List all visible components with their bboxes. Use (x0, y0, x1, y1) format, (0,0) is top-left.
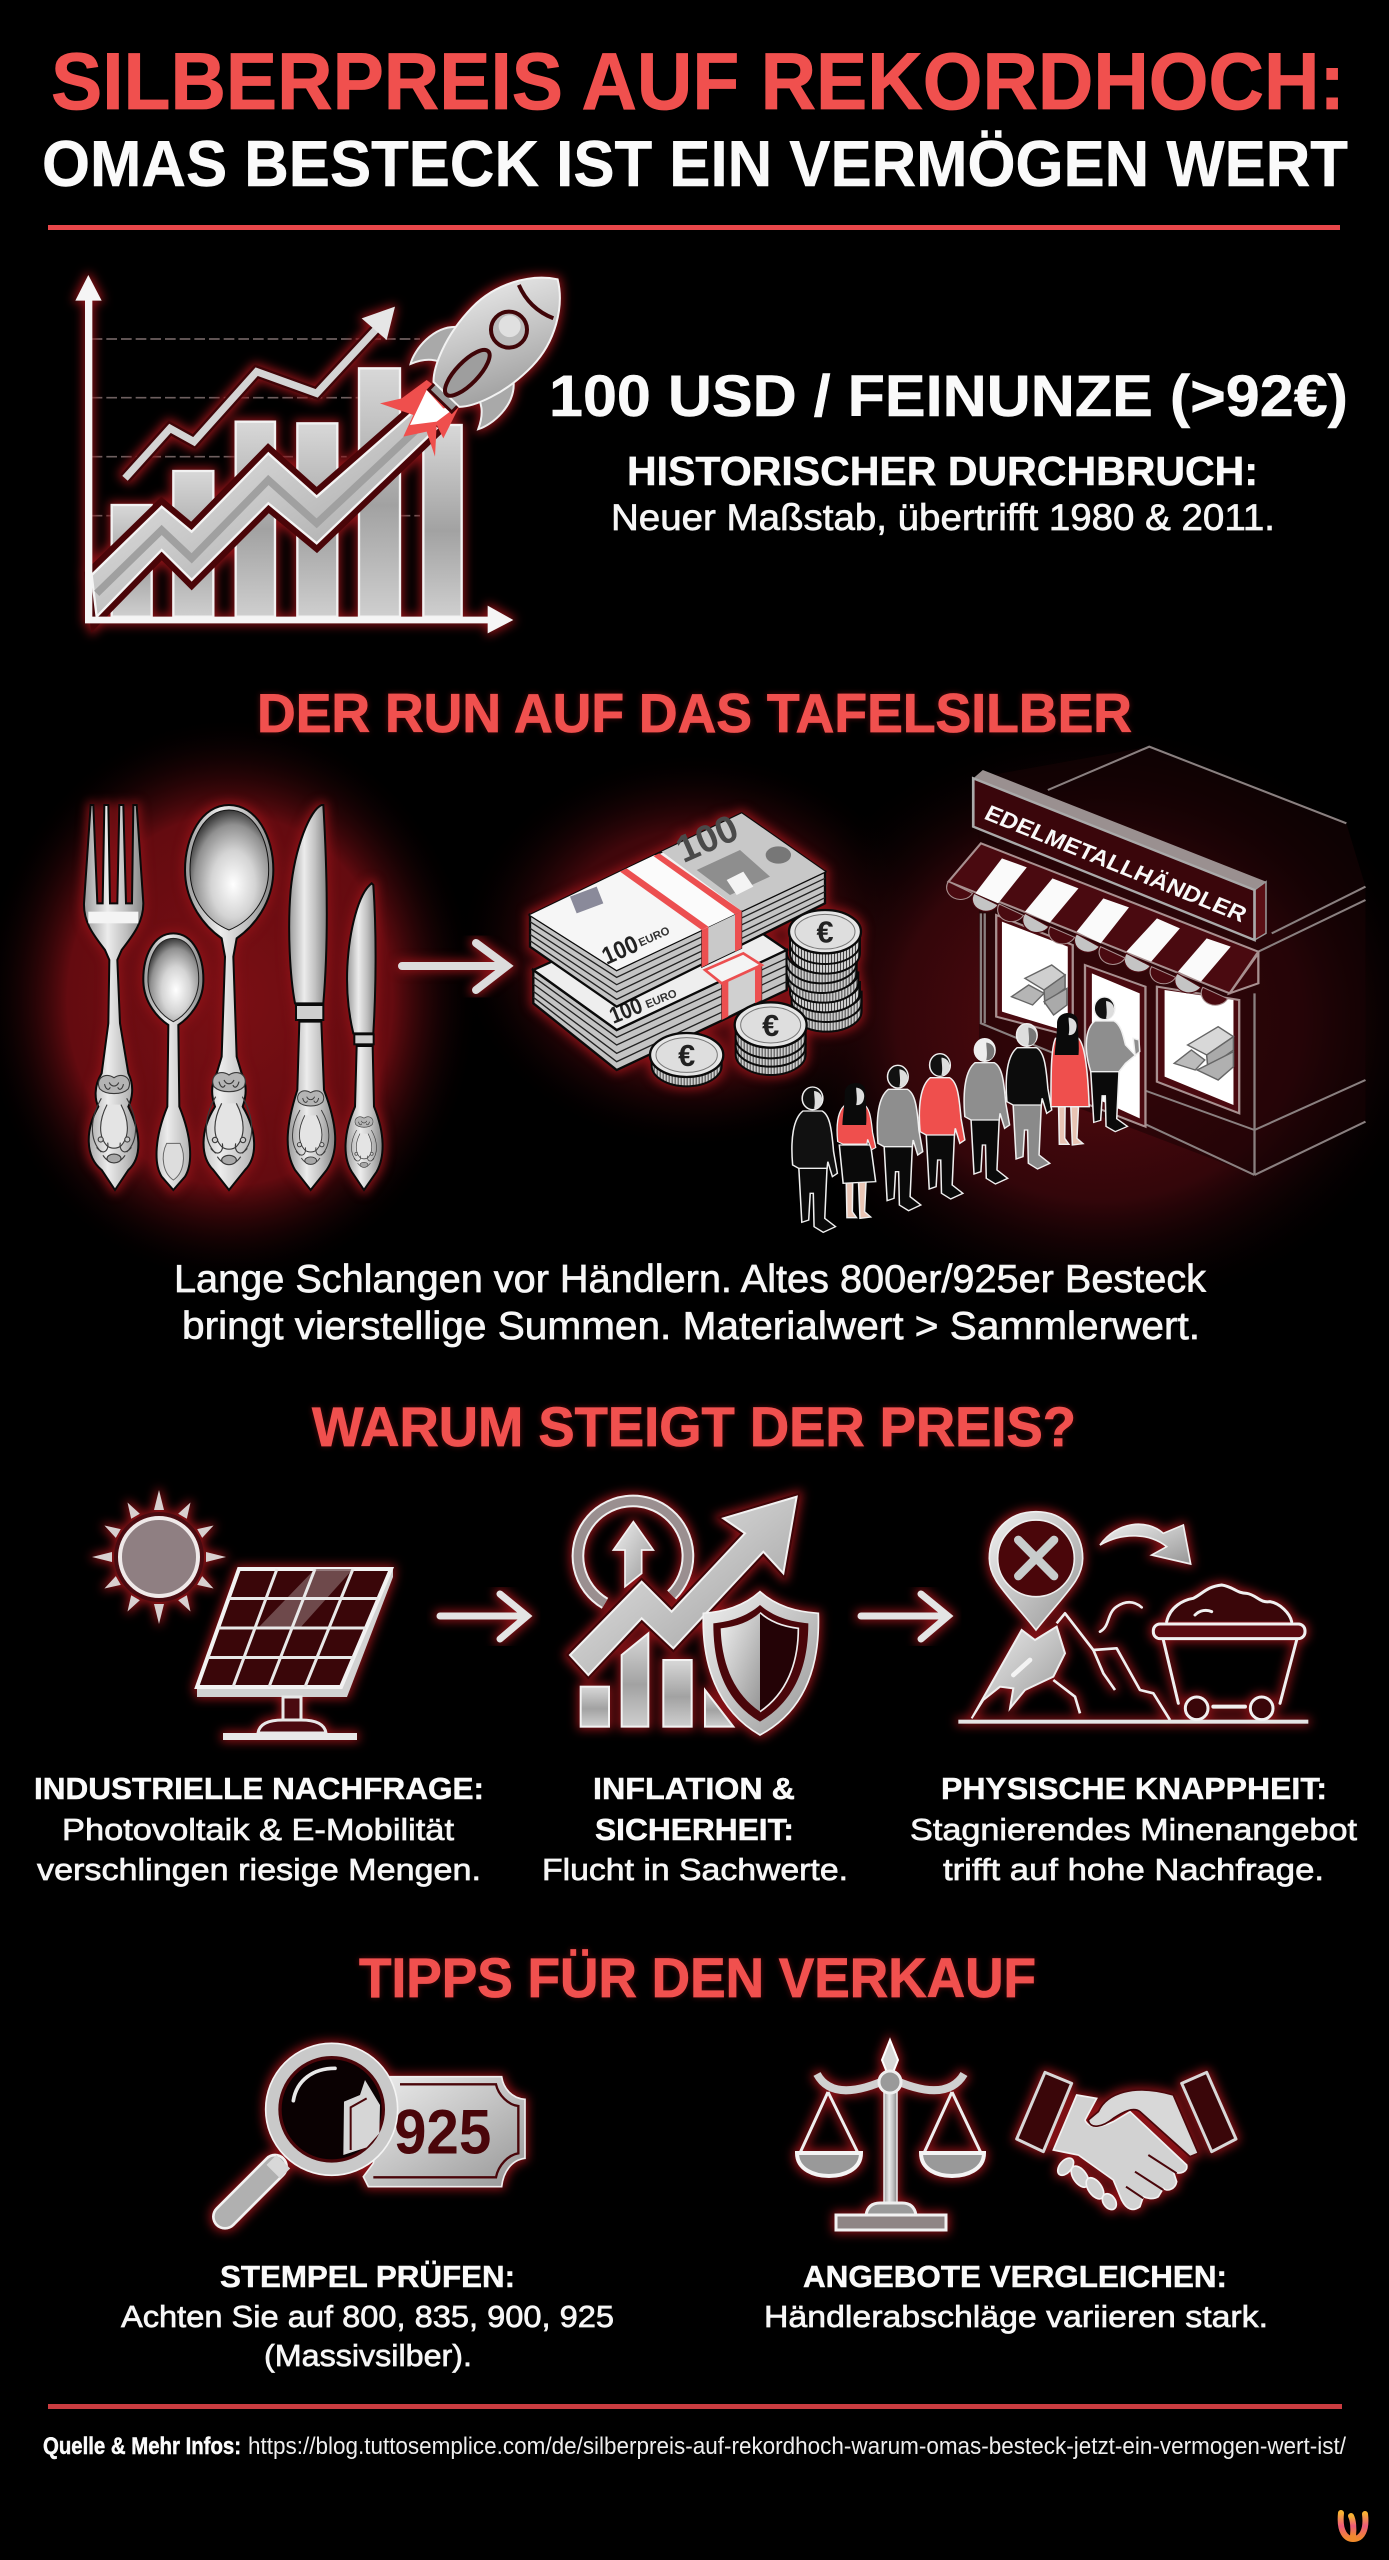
column: scarcity (910, 1771, 1357, 1887)
curved arrow (1100, 1524, 1191, 1564)
source line: https://blog.tuttosemplice.com/de/silberpreis-auf-rekordhoch-warum-omas-besteck-jetzt-ein-vermogen-wert-ist/ (248, 2433, 1346, 2460)
column: industrial demand: Photovoltaik & E-Mobilität (62, 1812, 454, 1847)
person 2 (837, 1083, 876, 1218)
column: inflation (542, 1771, 848, 1887)
tip: compare text: ANGEBOTE VERGLEICHEN: (803, 2259, 1227, 2294)
icon: scarcity mine and cart (958, 1512, 1308, 1724)
tip: hallmark text: STEMPEL PRÜFEN: (220, 2259, 515, 2294)
shop building (947, 747, 1365, 1175)
money and coins illustration (530, 807, 862, 1086)
tip: compare text: Händlerabschläge variieren stark. (764, 2299, 1268, 2334)
tip: hallmark text (121, 2259, 614, 2373)
lower banknote stack (533, 893, 787, 1070)
lower banknote stack: EURO (644, 988, 679, 1011)
icon: sun and solar panel (92, 1490, 393, 1740)
price: 100 USD / FEINUNZE (>92€) (549, 364, 1348, 429)
silver bars in window right (1174, 1027, 1233, 1080)
title line 1: SILBERPREIS AUF REKORDHOCH: (51, 37, 1345, 127)
shield (703, 1592, 818, 1735)
person 5 (964, 1039, 1010, 1184)
column: industrial demand (34, 1771, 484, 1887)
awning (947, 843, 1258, 1005)
person 7 (1051, 1013, 1089, 1145)
rising arrow (570, 1497, 797, 1675)
silver bars in window left (1012, 965, 1067, 1015)
person 4 (919, 1054, 965, 1199)
coin stack middle: € (762, 1009, 779, 1043)
column: industrial demand: verschlingen riesige Mengen. (37, 1852, 481, 1887)
description: run: bringt vierstellige Summen. Materialwert > Sammlerwert. (182, 1305, 1200, 1348)
ring with up arrow (578, 1501, 688, 1603)
sign: EDELMETALLHÄNDLER (980, 801, 1251, 928)
queue of people (792, 997, 1140, 1232)
column: scarcity: Stagnierendes Minenangebot (910, 1812, 1357, 1847)
hallmark plate (363, 2077, 525, 2187)
coin stack middle (735, 1002, 807, 1075)
coin stack right (787, 910, 862, 1032)
windows and door (996, 915, 1239, 1127)
fork (84, 805, 143, 1190)
heading: tips: TIPPS FÜR DEN VERKAUF (359, 1946, 1036, 2009)
icon: handshake (1017, 2072, 1236, 2212)
tip: hallmark text: (Massivsilber). (264, 2338, 472, 2373)
small spoon (143, 933, 203, 1190)
person 3 (877, 1065, 923, 1211)
person 8 (1086, 997, 1140, 1132)
upper banknote stack: EURO (637, 925, 672, 949)
upper banknote stack: 100 (670, 807, 745, 872)
sun (92, 1490, 226, 1624)
heading: why: WARUM STEIGT DER PREIS? (312, 1395, 1076, 1458)
map pin (989, 1512, 1083, 1630)
tip: compare text (764, 2259, 1268, 2334)
mountain (972, 1602, 1170, 1720)
large knife (288, 805, 335, 1190)
column: inflation: INFLATION & (593, 1771, 795, 1806)
description: Neuer Maßstab, übertrifft 1980 & 2011. (611, 497, 1275, 538)
person 6 (1006, 1024, 1052, 1169)
shop and queue illustration (792, 747, 1365, 1232)
panel (197, 1567, 393, 1740)
icon: scales (797, 2040, 984, 2230)
large spoon (185, 805, 273, 1190)
icon: magnifier and hallmark (225, 2043, 525, 2217)
column: scarcity: trifft auf hohe Nachfrage. (943, 1852, 1324, 1887)
price headline block (549, 364, 1348, 538)
arrow: cutlery to money (402, 943, 507, 990)
cutlery illustration (84, 805, 383, 1190)
arrow 2 (861, 1594, 948, 1639)
arrow 1 (440, 1594, 527, 1639)
lens (266, 2043, 398, 2175)
chart with rocket (75, 243, 596, 633)
title line 2: OMAS BESTECK IST EIN VERMÖGEN WERT (42, 127, 1348, 200)
column: inflation: SICHERHEIT: (595, 1812, 794, 1847)
person 1 (792, 1087, 837, 1232)
title (42, 37, 1348, 200)
hallmark plate: 925 (394, 2097, 491, 2167)
description: run: Lange Schlangen vor Händlern. Altes 800er/925er Besteck (174, 1258, 1207, 1301)
handle (225, 2162, 283, 2217)
source line: Quelle & Mehr Infos: (43, 2433, 241, 2460)
small knife (346, 883, 383, 1190)
bars (581, 1633, 733, 1727)
upper banknote stack: 100 (598, 931, 643, 970)
column: scarcity: PHYSISCHE KNAPPHEIT: (941, 1771, 1327, 1806)
icon: logo (1341, 2513, 1365, 2539)
tip: hallmark text: Achten Sie auf 800, 835, 900, 925 (121, 2299, 614, 2334)
mine cart (1153, 1585, 1305, 1720)
coin front (650, 1033, 723, 1086)
coin stack right: € (816, 915, 834, 949)
heading: run: DER RUN AUF DAS TAFELSILBER (257, 682, 1132, 744)
upper banknote stack (530, 807, 825, 1007)
subheading: HISTORISCHER DURCHBRUCH: (627, 448, 1258, 494)
description: run (174, 1258, 1207, 1348)
column: inflation: Flucht in Sachwerte. (542, 1852, 848, 1887)
lower banknote stack: 100 (605, 992, 646, 1029)
icon: inflation and security (570, 1497, 818, 1735)
coin front: € (678, 1039, 695, 1073)
column: industrial demand: INDUSTRIELLE NACHFRAGE: (34, 1771, 484, 1806)
